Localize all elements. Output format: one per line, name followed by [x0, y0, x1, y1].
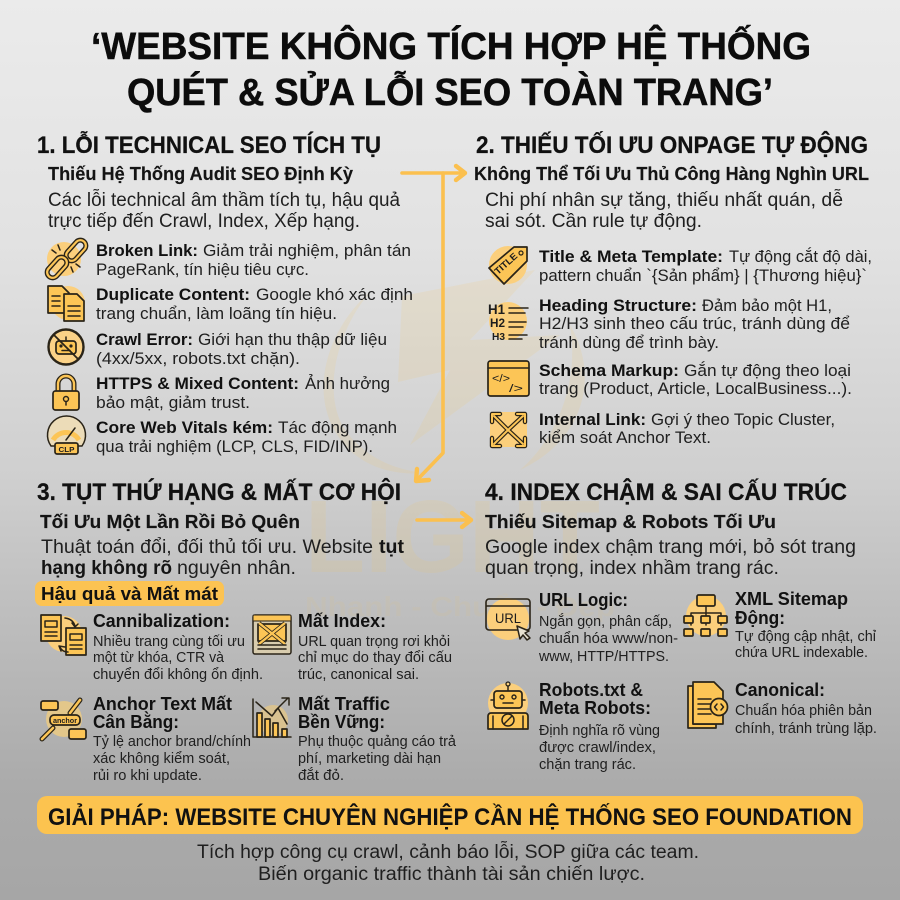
text block: closing statement: Tích hợp công cụ crawl, cảnh báo lỗi, SOP giữa các team.: [197, 841, 699, 863]
text: internal link: kiểm soát Anchor Text.: [539, 428, 711, 447]
title: QUÉT & SỬA LỖI SEO TOÀN TRANG’: [127, 69, 773, 114]
icon: xml sitemap: [684, 595, 727, 636]
text: https: HTTPS & Mixed Content:: [96, 374, 299, 393]
text: xml sitemap: Tự động cập nhật, chỉ: [735, 628, 877, 645]
text: core web vitals: [96, 418, 397, 456]
text: traffic loss: [298, 693, 457, 784]
text: title and meta: Title & Meta Template:: [539, 247, 723, 266]
text: cannibalization: một từ khóa, CTR và: [93, 649, 225, 666]
icon: traffic loss chart: [253, 698, 291, 737]
text: title and meta: Tự động cắt độ dài,: [729, 247, 872, 266]
text: canonical: chính, tránh trùng lặp.: [735, 720, 877, 737]
icon: heading structure: H2: [490, 316, 505, 330]
text: cannibalization: chuyển đổi không ổn định.: [93, 666, 263, 683]
icon: broken link: [45, 238, 88, 280]
icon: title tag: TITLE: [493, 251, 520, 277]
callout: consequences label: Hậu quả và Mất mát: [41, 583, 219, 604]
heading: section 2: 2. THIẾU TỐI ƯU ONPAGE TỰ ĐỘNG: [476, 131, 868, 159]
text: canonical: Canonical:: [735, 679, 825, 700]
text: schema markup: Schema Markup:: [539, 361, 679, 380]
icon: cannibalization: [41, 615, 86, 655]
text: https: Ảnh hưởng: [305, 374, 390, 393]
icon: anchor text imbalance: [41, 700, 86, 739]
text: internal link: Gợi ý theo Topic Cluster,: [651, 410, 835, 429]
text: schema markup: trang (Product, Article, LocalBusiness...).: [539, 379, 852, 398]
text: lost index: [298, 610, 452, 683]
icon: title tag: [489, 246, 527, 284]
text: duplicate content: Google khó xác định: [256, 285, 413, 304]
text: anchor text: Anchor Text Mất: [93, 693, 232, 714]
text: broken link: PageRank, tín hiệu tiêu cực.: [96, 260, 309, 279]
text: url logic: [538, 589, 678, 665]
watermark: logo: Nhanh - Chuẩn - Đẹp: [305, 591, 615, 622]
text: robots: Meta Robots:: [539, 697, 651, 718]
text: internal link: Internal Link:: [539, 410, 646, 429]
text: cannibalization: Cannibalization:: [93, 610, 230, 631]
text: traffic loss: Phụ thuộc quảng cáo trả: [298, 733, 457, 750]
text: url logic: chuẩn hóa www/non-: [539, 630, 678, 647]
text: url logic: Ngắn gọn, phân cấp,: [539, 613, 672, 630]
watermark: logo: LIGHT: [305, 479, 600, 594]
text block: section 4 intro: Google index chậm trang mới, bỏ sót trang: [485, 537, 856, 558]
icon: anchor text imbalance: anchor: [53, 718, 77, 725]
text: core web vitals: Core Web Vitals kém:: [96, 418, 273, 437]
text block: section 3 intro: nguyên nhân.: [177, 558, 296, 579]
text: traffic loss: Bền Vững:: [298, 711, 385, 732]
arrow: section 3 to section 4: [417, 513, 471, 527]
text: url logic: URL Logic:: [539, 589, 628, 610]
text: core web vitals: qua trải nghiệm (LCP, CLS, FID/INP).: [96, 437, 373, 456]
text: cannibalization: [93, 610, 263, 683]
text: https: bảo mật, giảm trust.: [96, 393, 250, 412]
text: robots: [539, 679, 660, 773]
text: xml sitemap: Động:: [735, 607, 785, 628]
text: url logic: www, HTTP/HTTPS.: [538, 648, 669, 665]
panel: section 2 onpage: [474, 131, 872, 447]
title: [91, 23, 811, 114]
subheading: section 1: Thiếu Hệ Thống Audit SEO Định Kỳ: [48, 163, 354, 184]
text: xml sitemap: chứa URL indexable.: [735, 644, 868, 661]
text: xml sitemap: [735, 588, 877, 661]
icon: heading structure: H1: [488, 302, 505, 317]
text: anchor text: xác không kiểm soát,: [93, 750, 230, 767]
icon: schema markup: </>: [492, 373, 510, 385]
text: heading structure: Heading Structure:: [539, 296, 697, 315]
text: robots: Định nghĩa rõ vùng: [539, 722, 660, 739]
text block: closing statement: Biến organic traffic thành tài sản chiến lược.: [258, 864, 645, 885]
text block: closing statement: [197, 841, 699, 885]
subheading: section 2: Không Thể Tối Ưu Thủ Công Hàng Nghìn URL: [474, 163, 869, 184]
icon: lost index: [253, 615, 291, 654]
text: duplicate content: trang chuẩn, làm loãng tín hiệu.: [96, 304, 337, 323]
icon: core web vitals gauge: CLP: [58, 445, 74, 454]
icon: url logic: URL: [495, 611, 521, 626]
text: anchor text: Cân Bằng:: [93, 711, 179, 732]
icon: crawl error: [48, 330, 84, 364]
icon: heading structure: H3: [492, 331, 505, 343]
text: duplicate content: [96, 285, 413, 323]
text: duplicate content: Duplicate Content:: [96, 285, 250, 304]
text: canonical: [735, 679, 877, 737]
panel: section 3 ranking loss: [35, 478, 457, 784]
text: robots: chặn trang rác.: [539, 756, 636, 773]
banner: solution: GIẢI PHÁP: WEBSITE CHUYÊN NGHIỆP CẦN HỆ THỐNG SEO FOUNDATION: [48, 802, 852, 831]
watermark: logo: [305, 270, 615, 622]
text: canonical: Chuẩn hóa phiên bản: [735, 702, 872, 719]
subheading: section 4: Thiếu Sitemap & Robots Tối Ưu: [485, 511, 776, 532]
text: broken link: Broken Link:: [96, 241, 198, 260]
icon: lock: [53, 376, 79, 410]
text: traffic loss: phí, marketing dài hạn: [298, 750, 441, 767]
text: xml sitemap: XML Sitemap: [735, 588, 848, 609]
text: cannibalization: Nhiều trang cùng tối ưu: [93, 633, 245, 650]
text: schema markup: [539, 361, 852, 398]
text: broken link: [96, 241, 411, 279]
text block: section 2 intro: [485, 189, 843, 232]
icon: duplicate content: [48, 286, 85, 321]
text: heading structure: [539, 296, 850, 352]
text block: section 3 intro: tụt: [379, 537, 405, 558]
text: core web vitals: Tác động mạnh: [278, 418, 397, 437]
icon: canonical: [688, 682, 728, 728]
text: crawl error: (4xx/5xx, robots.txt chặn).: [96, 349, 300, 368]
icon: heading structure: [488, 302, 528, 343]
text: lost index: Mất Index:: [298, 610, 386, 631]
panel: section 4 index: [485, 478, 877, 773]
text: robots: được crawl/index,: [539, 739, 656, 756]
text: heading structure: H2/H3 sinh theo cấu trúc, tránh dùng để: [539, 314, 850, 333]
heading: section 4: 4. INDEX CHẬM & SAI CẤU TRÚC: [485, 478, 847, 506]
text: internal link: [539, 410, 835, 447]
text: heading structure: Đảm bảo một H1,: [702, 296, 832, 315]
text block: section 1 intro: Các lỗi technical âm thầm tích tụ, hậu quả: [48, 189, 400, 211]
text: lost index: trúc, canonical sai.: [298, 666, 419, 683]
heading: section 3: 3. TỤT THỨ HẠNG & MẤT CƠ HỘI: [37, 478, 401, 506]
banner: solution: [37, 796, 863, 834]
icon: schema markup: [488, 361, 529, 396]
text block: section 3 intro: Thuật toán đổi, đối thủ tối ưu. Website: [41, 537, 373, 558]
text: crawl error: [96, 330, 387, 368]
text: traffic loss: Mất Traffic: [298, 693, 390, 714]
icon: robots: [488, 682, 528, 729]
text block: section 1 intro: [48, 189, 400, 232]
text block: section 3 intro: [41, 537, 405, 579]
text: traffic loss: đắt đỏ.: [298, 767, 344, 784]
text: anchor text: rủi ro khi update.: [93, 767, 202, 784]
text: title and meta: [539, 247, 872, 285]
text: robots: Robots.txt &: [539, 679, 643, 700]
text block: section 4 intro: [485, 537, 856, 579]
text: crawl error: Giới hạn thu thập dữ liệu: [198, 330, 387, 349]
text: anchor text: [93, 693, 251, 784]
text: schema markup: Gắn tự động theo loại: [684, 361, 851, 380]
text: lost index: URL quan trọng rơi khỏi: [298, 633, 450, 650]
icon: schema markup: />: [509, 383, 523, 395]
text: anchor text: Tỷ lệ anchor brand/chính: [93, 733, 251, 750]
text block: section 1 intro: trực tiếp đến Crawl, Index, Xếp hạng.: [48, 211, 360, 232]
text: heading structure: tránh dùng để trình bày.: [539, 333, 719, 352]
text: title and meta: pattern chuẩn `{Sản phẩm} | {Thương hiệu}`: [539, 266, 867, 285]
arrow: section 1 to section 2 and section 3: [402, 166, 465, 481]
text block: section 2 intro: sai sót. Cần rule tự động.: [485, 211, 702, 232]
text: crawl error: Crawl Error:: [96, 330, 193, 349]
heading: section 1: 1. LỖI TECHNICAL SEO TÍCH TỤ: [37, 130, 381, 159]
text block: section 3 intro: hạng không rõ: [41, 558, 172, 579]
title: ‘WEBSITE KHÔNG TÍCH HỢP HỆ THỐNG: [91, 23, 811, 68]
text: lost index: chỉ mục do thay đổi cấu: [298, 649, 452, 666]
text block: section 4 intro: quan trọng, index nhầm trang rác.: [485, 558, 779, 579]
icon: core web vitals gauge: [48, 416, 86, 454]
text: https: [96, 374, 390, 412]
subheading: section 3: Tối Ưu Một Lần Rồi Bỏ Quên: [40, 511, 300, 532]
text block: section 2 intro: Chi phí nhân sự tăng, thiếu nhất quán, dễ: [485, 189, 843, 211]
text: broken link: Giảm trải nghiệm, phân tán: [203, 241, 411, 260]
panel: section 1 technical SEO: [37, 130, 413, 456]
icon: url logic: [486, 598, 530, 640]
icon: internal link arrows: [490, 412, 527, 447]
